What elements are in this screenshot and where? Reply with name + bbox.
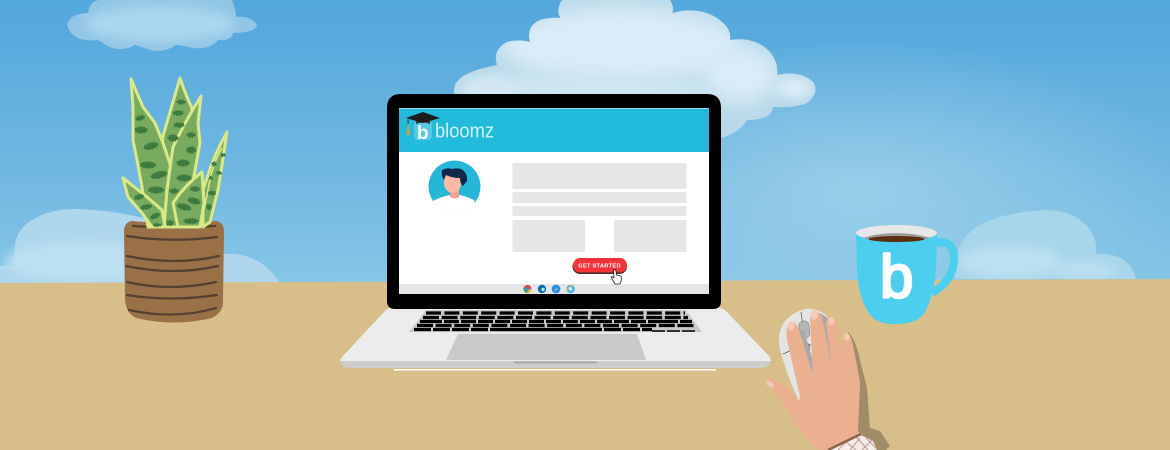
laptop notch (514, 362, 597, 364)
keyboard (409, 310, 702, 332)
cloud: low left (0, 209, 280, 283)
taskbar (399, 284, 709, 294)
shirt cuff (828, 434, 878, 450)
cloud: low right (955, 210, 1136, 279)
touchpad (446, 334, 646, 360)
laptop lid (387, 94, 721, 309)
screen header bar (399, 108, 709, 152)
woven pot (124, 221, 224, 322)
get started button (572, 258, 627, 274)
hand on mouse (765, 309, 890, 450)
laptop (340, 94, 771, 371)
desk surface (0, 279, 1170, 450)
coffee mug (856, 225, 954, 324)
plant leaves (123, 78, 227, 227)
laptop base (340, 307, 771, 362)
content blocks (512, 163, 686, 252)
logo icon (414, 121, 432, 140)
plant in woven pot (123, 78, 227, 322)
cloud: top left (67, 0, 257, 51)
profile avatar (428, 160, 480, 214)
hand cursor (611, 270, 621, 284)
mug body (856, 233, 937, 324)
mug inner shadow (862, 233, 931, 241)
bloomz logo (406, 112, 494, 144)
fingernails (765, 310, 850, 389)
mug handle (932, 242, 954, 293)
graduation cap (406, 112, 440, 135)
mug logo b: b (880, 243, 913, 310)
mug rim (856, 225, 937, 241)
mouse (779, 309, 838, 403)
hand shadow (845, 332, 890, 450)
screen (399, 108, 709, 294)
finger shadows on mouse (799, 313, 833, 376)
plant leaf markings (134, 100, 225, 226)
taskbar browser icons (523, 285, 575, 293)
coffee (868, 236, 924, 242)
get started button: GET STARTED (578, 264, 621, 270)
sky background (0, 0, 1170, 340)
pot stripes (126, 226, 219, 315)
wordmark: bloomz (435, 120, 494, 142)
logo b: b (417, 123, 429, 144)
cloud: large centre (450, 0, 820, 140)
hand (766, 311, 862, 450)
laptop front edge (340, 361, 771, 368)
laptop shadow line (394, 369, 716, 371)
